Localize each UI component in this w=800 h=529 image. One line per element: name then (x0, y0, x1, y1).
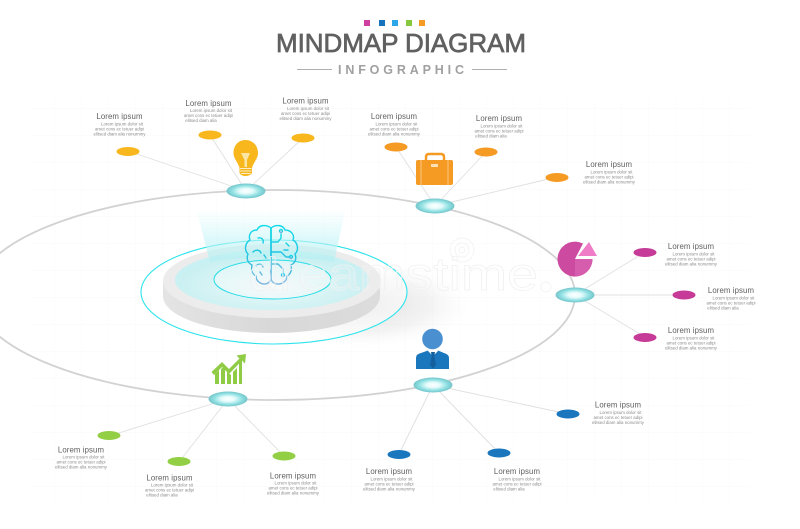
label 2: Lorem ipsum (708, 286, 754, 295)
label 1: Lorem ipsum dolor sit (63, 454, 105, 460)
connector lines (399, 385, 568, 454)
label 3: Lorem ipsum dolor sit (499, 476, 541, 482)
label 1: amet cons ec tetuer adipi (56, 460, 106, 464)
label 3: amet cons ec tetuer adipi (268, 486, 318, 490)
label 1: elitsed diam alia nonummy (665, 262, 718, 266)
label 2: Lorem ipsum dolor sit (151, 482, 194, 488)
label 1: Lorem ipsum dolor sit (600, 410, 642, 415)
label 2: elitsed diam alia nonummy (363, 486, 416, 492)
label 1: elitsed diam alia nonummy (592, 420, 645, 425)
orbit ring (0, 190, 575, 400)
label 2: Lorem ipsum (476, 114, 522, 123)
hub (208, 392, 248, 406)
watermark (248, 238, 551, 300)
label 1: amet cons ec tetuer adipi (95, 126, 144, 132)
label 3 (267, 472, 320, 496)
label 3: elitsed diam alia nonummy (583, 180, 636, 184)
nodes (384, 142, 568, 182)
platform side (163, 281, 380, 333)
label 1: amet cons ec tetuer adipi (369, 126, 419, 132)
inner pool (175, 250, 369, 310)
label 1: Lorem ipsum (96, 112, 143, 121)
label 3: elitsed diam alia (493, 486, 525, 492)
label 2: Lorem ipsum dolor sit (190, 108, 233, 113)
label 1: Lorem ipsum dolor sit (101, 122, 144, 126)
icon: brain (246, 226, 297, 284)
label 1: Lorem ipsum (58, 446, 104, 454)
nodes (388, 410, 580, 459)
hub (556, 288, 594, 302)
label 1: Lorem ipsum dolor sit (376, 122, 418, 126)
branch: growth (green) (55, 354, 320, 498)
label 1: elitsed diam alia nonummy (55, 464, 108, 470)
hub (226, 184, 266, 198)
nodes (116, 130, 314, 156)
label 2: Lorem ipsum (146, 474, 193, 482)
label 3: amet cons ec tetuer adipi (281, 111, 330, 116)
label 3: amet cons ec tetuer adipi (492, 482, 542, 486)
icon: business person (416, 329, 449, 369)
platform top (163, 244, 381, 318)
label 1: Lorem ipsum dolor sit (673, 252, 715, 256)
outer cyan ring (141, 240, 407, 344)
label 3: Lorem ipsum (270, 472, 316, 480)
label 3: Lorem ipsum (586, 160, 632, 169)
label 2: elitsed diam alia (707, 306, 739, 310)
label 3 (492, 467, 542, 492)
label 1 (665, 242, 718, 266)
label 3: Lorem ipsum dolor sit (673, 336, 715, 340)
subtitle: INFOGRAPHIC (338, 63, 464, 77)
connector lines (396, 147, 557, 206)
header (276, 20, 526, 77)
label 1 (368, 112, 421, 136)
label 3: Lorem ipsum (282, 96, 329, 106)
hub (414, 378, 452, 392)
label 2: elitsed diam alia (185, 118, 217, 123)
label 3: elitsed diam alia nonummy (267, 490, 320, 496)
label 2: Lorem ipsum dolor sit (371, 476, 413, 482)
label 1: amet cons ec tetuer adipi (666, 256, 716, 262)
nodes (98, 431, 296, 466)
central platform (141, 212, 470, 347)
label 2: amet cons ec tetuer adipi (364, 482, 414, 486)
branch: analytics (magenta) (556, 242, 756, 350)
light beam (197, 212, 345, 262)
label 2: Lorem ipsum dolor sit (713, 296, 755, 300)
colour squares (364, 20, 425, 26)
label 2: Lorem ipsum (366, 467, 412, 476)
label 2 (706, 286, 756, 310)
label 1 (55, 446, 108, 470)
label 3: Lorem ipsum dolor sit (287, 106, 330, 111)
connector lines (575, 252, 684, 337)
label 1: amet cons ec tetuer adipi (593, 415, 643, 420)
label 3: elitsed diam alia nonummy (665, 346, 718, 350)
label 3: Lorem ipsum (494, 467, 540, 476)
label 1: Lorem ipsum (595, 400, 641, 410)
icon: growth chart (212, 354, 246, 384)
label 1 (94, 112, 146, 136)
label 3 (280, 96, 332, 121)
label 2: amet cons ec tetuer adipi (706, 300, 756, 306)
icon: pie chart (558, 242, 597, 277)
label 2: Lorem ipsum (185, 99, 232, 108)
hub (416, 198, 454, 214)
title: MINDMAP DIAGRAM (276, 28, 526, 58)
branch: people (blue) (363, 329, 645, 492)
label 3: Lorem ipsum dolor sit (591, 170, 633, 174)
label 3: amet cons ec tetuer adipi (666, 340, 716, 346)
label 3: Lorem ipsum dolor sit (275, 480, 317, 486)
label 3 (665, 326, 718, 350)
label 3: elitsed diam alia nonummy (280, 116, 332, 121)
label 2 (184, 99, 233, 123)
label 2: Lorem ipsum dolor sit (481, 124, 523, 128)
label 2: amet cons ec tetuer adipi (184, 113, 233, 118)
branch: business (orange) (368, 112, 636, 214)
label 2 (145, 474, 194, 498)
label 1: elitsed diam alia nonummy (368, 132, 421, 136)
label 2 (474, 114, 524, 138)
label 2 (363, 467, 416, 492)
branch: ideas (yellow) (94, 96, 332, 198)
inner cyan ring (214, 260, 331, 299)
label 1: Lorem ipsum (668, 242, 714, 251)
connector lines (128, 135, 303, 191)
connector lines (109, 399, 284, 462)
platform shadow (250, 263, 470, 347)
label 2: elitsed diam alia (475, 134, 507, 138)
label 1: elitsed diam alia nonummy (94, 132, 146, 136)
label 3 (583, 160, 636, 184)
label 1: Lorem ipsum (371, 112, 417, 121)
label 2: amet cons ec tetuer adipi (474, 128, 524, 134)
label 3: Lorem ipsum (668, 326, 714, 335)
icon: light bulb (234, 140, 258, 176)
label 1 (592, 400, 645, 425)
icon: briefcase (416, 154, 453, 185)
nodes (634, 248, 696, 342)
label 2: amet cons ec tetuer adipi (145, 488, 194, 492)
watermark: dreamstime (248, 248, 538, 300)
label 2: elitsed diam alia (146, 492, 178, 498)
label 3: amet cons ec tetuer adipi (584, 174, 634, 180)
